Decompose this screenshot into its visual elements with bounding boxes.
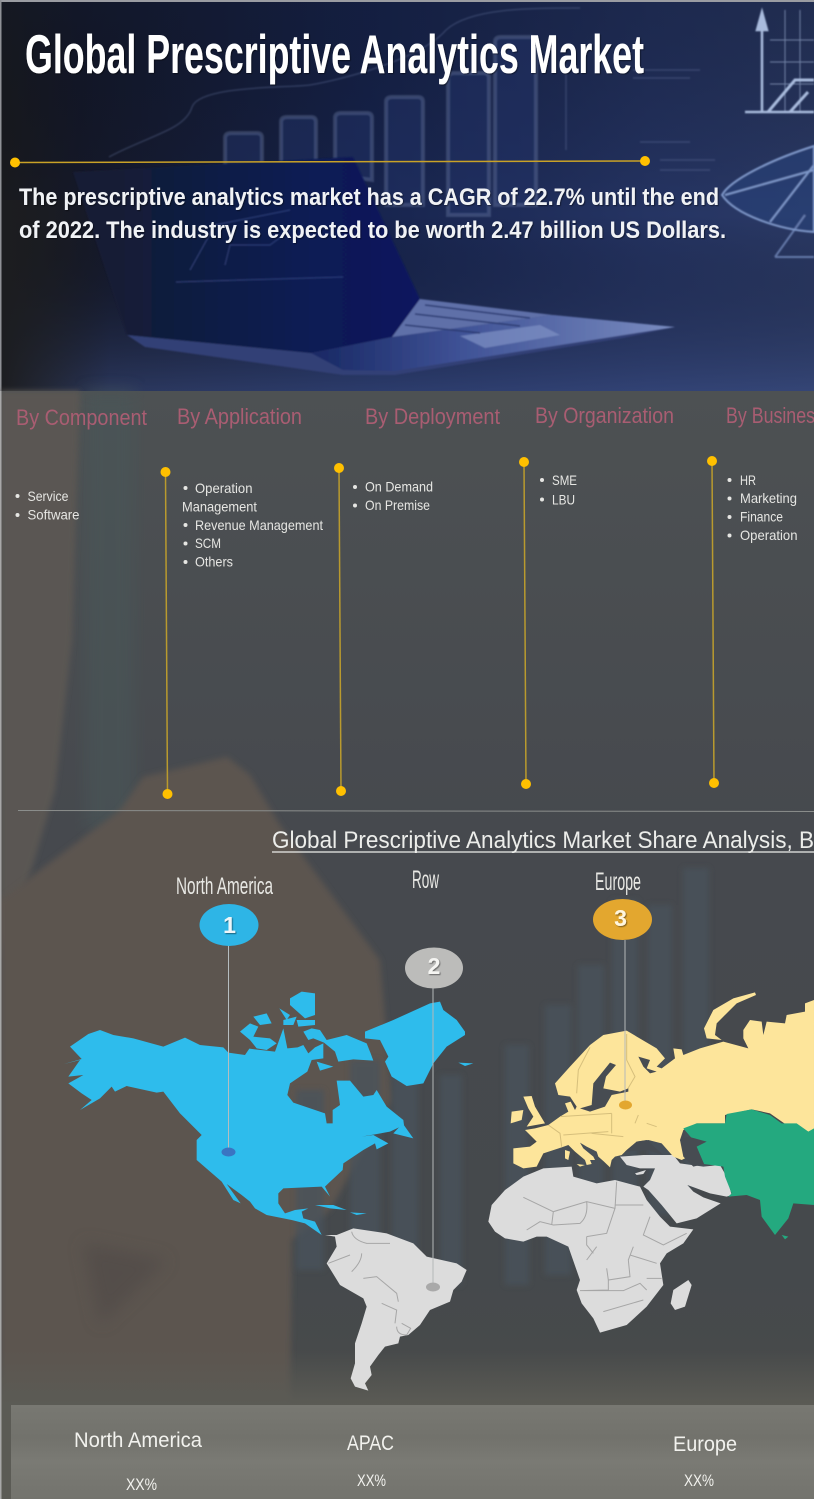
share: North America (74, 1429, 202, 1494)
column: By Application (160, 404, 323, 799)
share: APAC: XX% (357, 1471, 386, 1490)
panel: regional share table (11, 1405, 814, 1499)
map: Baltic, White and Black seas (580, 1057, 663, 1155)
share: Europe: XX% (684, 1471, 714, 1490)
column: By Business: Finance (740, 508, 783, 524)
share: North America: North America (74, 1429, 202, 1452)
column: By Deployment: On Premise (365, 497, 430, 513)
illustration: faint chart with axes (745, 10, 814, 112)
column: By Application: Management (182, 498, 257, 514)
column: By Application: By Application (177, 404, 302, 429)
map: Africa and Middle East (488, 1155, 732, 1333)
illustration: faint bar chart (225, 37, 536, 215)
share: APAC (347, 1432, 394, 1490)
share: North America: XX% (126, 1475, 157, 1494)
illustration: laptop (73, 157, 675, 375)
marker: Row: Row (412, 866, 440, 894)
world map (64, 992, 814, 1391)
map: Europe and Russia (511, 992, 814, 1168)
column: By Deployment (334, 404, 500, 796)
illustration: faint pie chart (722, 146, 814, 257)
column: By Business: HR (740, 472, 756, 488)
column: By Organization: LBU (552, 492, 575, 508)
illustration: faint sketch lines (109, 8, 715, 170)
marker: Row: 2 (428, 953, 440, 979)
summary text (19, 184, 726, 244)
marker: North America (176, 873, 273, 1156)
share: APAC: APAC (347, 1432, 394, 1455)
panel: hero header with laptop photo (0, 0, 814, 391)
column: By Organization: SME (552, 472, 577, 488)
panel: lower background with hand and faded bars (0, 391, 814, 1499)
marker: North America: North America (176, 873, 273, 900)
marker: Europe (593, 868, 652, 1110)
map: Caspian Sea (680, 1137, 707, 1167)
column: By Component: By Component (16, 405, 147, 430)
column: By Component: Software (28, 506, 80, 522)
column: By Application: Revenue Management (195, 517, 323, 533)
map: South America (325, 1228, 467, 1391)
panel: segment columns (16, 403, 814, 799)
column: By Business: Operation (740, 527, 798, 543)
column: By Component: Service (28, 488, 69, 504)
column: By Application: Operation (195, 480, 252, 496)
marker: Europe: 3 (614, 905, 627, 931)
column: By Deployment: On Demand (365, 478, 433, 494)
summary text: The prescriptive analytics market has a CAGR of 22.7% until the end (19, 184, 719, 211)
map: Central and South Asia (683, 1109, 814, 1239)
column: By Deployment: By Deployment (365, 404, 500, 429)
column: By Organization (519, 403, 674, 789)
title divider with end dots (10, 156, 650, 168)
marker: Europe: Europe (595, 868, 641, 896)
summary text: of 2022. The industry is expected to be worth 2.47 billion US Dollars. (19, 217, 726, 244)
map: North America (64, 992, 473, 1235)
column: By Organization: By Organization (535, 403, 674, 428)
column: By Business: Marketing (740, 490, 797, 506)
marker: North America: 1 (223, 912, 236, 938)
column: By Component (16, 405, 147, 522)
column: By Application: Others (195, 554, 233, 570)
column: By Business (707, 403, 814, 788)
marker: Row (405, 866, 463, 1292)
illustration: chart on laptop screen (176, 210, 343, 282)
share: Europe (673, 1433, 737, 1490)
column: By Application: SCM (195, 535, 221, 551)
share: Europe: Europe (673, 1433, 737, 1456)
